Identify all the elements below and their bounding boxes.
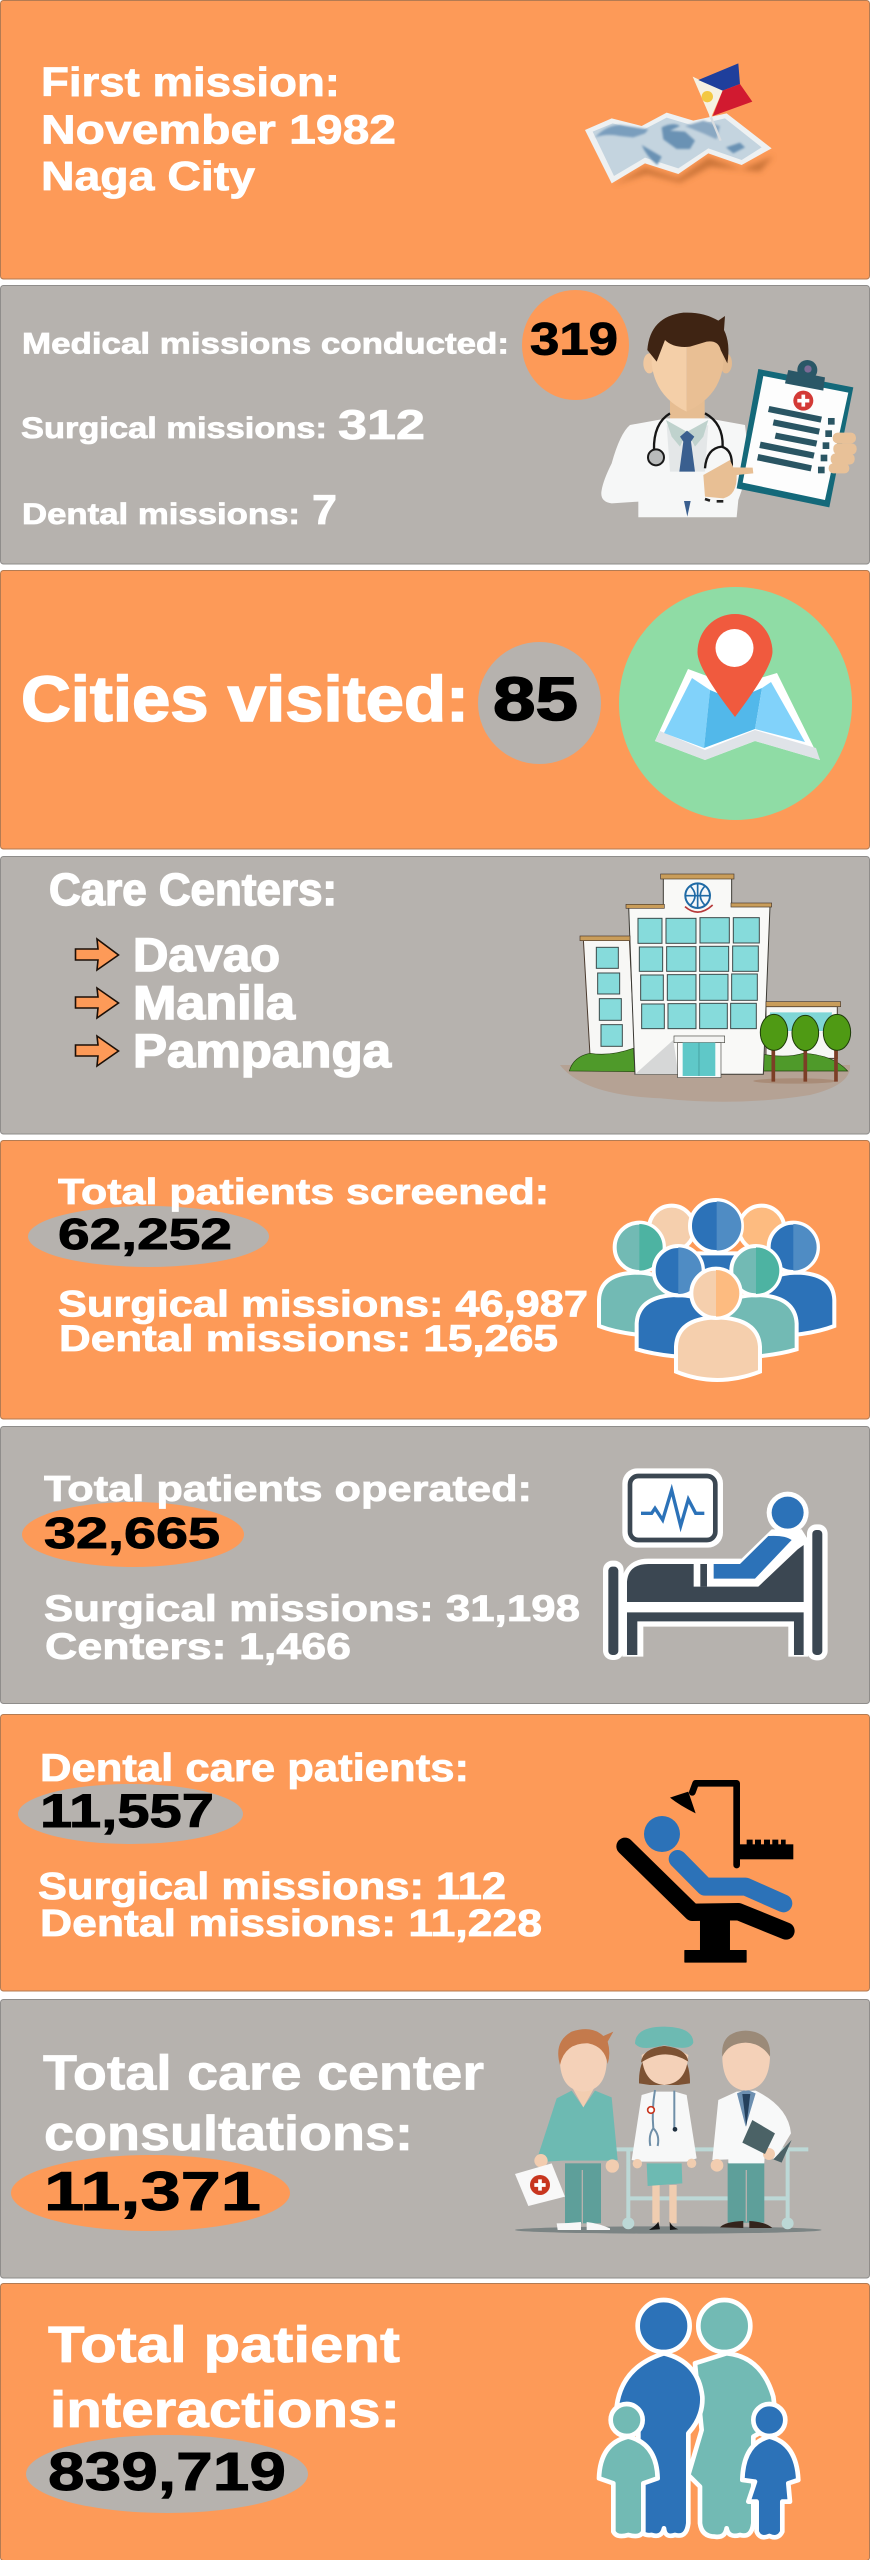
list: care center cities (76, 928, 392, 1077)
icon: patient in bed with monitor (603, 1468, 828, 1660)
badge: 839,719: 839,719 (48, 2442, 286, 2502)
text: surgical missions: Surgical missions: 46,987 (58, 1284, 588, 1324)
panel: missions conducted (0, 286, 870, 564)
man with kit (515, 2029, 619, 2230)
heading: total patients screened: Total patients screened: (58, 1171, 549, 1212)
icon: medical team (515, 2027, 822, 2234)
icon: crowd of people (599, 1200, 834, 1380)
arrow (76, 988, 118, 1018)
heading: dental care patients: Dental care patients: (40, 1747, 469, 1790)
badge: 319 (522, 290, 629, 400)
text: cities visited: Cities visited: (21, 663, 469, 735)
panel: first mission (0, 0, 870, 279)
icon: doctor with clipboard (601, 313, 857, 517)
text: first mission date and place: First mission: (41, 59, 340, 105)
icon: hospital building (560, 874, 851, 1102)
text: medical missions conducted: Medical missions conducted: (22, 328, 509, 360)
panel: dental care patients (0, 1714, 870, 1991)
text: dental missions 7 (22, 486, 337, 533)
badge: 11,557 (18, 1784, 243, 1844)
panel: total patients operated (0, 1426, 870, 1704)
text: centers: Centers: 1,466 (45, 1626, 351, 1667)
panel: total care center consultations (0, 2000, 870, 2278)
text: first mission date and place (41, 59, 396, 199)
text: dental missions 7: 7 (312, 486, 337, 533)
text: dental missions: Dental missions: 11,228 (40, 1903, 542, 1945)
icon: dental chair (625, 1783, 793, 1963)
badge: 319: 319 (530, 314, 618, 364)
heading: total care center consultations (43, 2046, 484, 2161)
badge: 11,557: 11,557 (40, 1784, 214, 1837)
panel: care centers (0, 856, 870, 1134)
badge: 839,719 (26, 2435, 308, 2513)
text: surgical missions 312: 312 (338, 401, 425, 448)
icon: map pin on green circle (619, 587, 852, 820)
badge: 11,371: 11,371 (44, 2160, 261, 2222)
panel: total patient interactions (0, 2284, 870, 2560)
text: first mission date and place: Naga City (41, 153, 255, 199)
badge: 32,665: 32,665 (44, 1509, 220, 1558)
city: Manila: Manila (133, 976, 296, 1029)
heading: care centers: Care Centers: (49, 864, 337, 915)
heading: total care center consultations: consultations: (44, 2107, 413, 2161)
city: Davao: Davao (133, 928, 280, 981)
arrow (76, 1036, 118, 1066)
badge: 11,371 (11, 2155, 290, 2231)
text: dental missions: Dental missions: 15,265 (59, 1318, 558, 1359)
text: surgical missions 312: Surgical missions: (21, 412, 327, 445)
text: first mission date and place: November 1982 (41, 106, 396, 152)
text: dental missions 7: Dental missions: (22, 498, 300, 531)
badge: 62,252: 62,252 (58, 1210, 232, 1259)
heading: total patients operated: Total patients operated: (44, 1468, 532, 1509)
badge: 62,252 (28, 1206, 269, 1267)
doctor with folder (711, 2031, 792, 2228)
heading: total patient interactions: interactions: (50, 2381, 400, 2438)
heading: total patient interactions: Total patient (48, 2316, 400, 2373)
nurse (632, 2027, 697, 2230)
heading: total care center consultations: Total care center (43, 2046, 484, 2100)
text: surgical missions: Surgical missions: 31,198 (44, 1588, 580, 1629)
badge: 85 (478, 642, 601, 764)
icon: family of four (599, 2300, 798, 2537)
panel: total patients screened (0, 1140, 870, 1419)
panel: cities visited (0, 570, 870, 849)
text: surgical missions: Surgical missions: 112 (38, 1866, 506, 1908)
city: Pampanga: Pampanga (133, 1024, 392, 1077)
text: surgical missions 312 (21, 401, 425, 448)
arrow (76, 939, 118, 970)
badge: 85: 85 (493, 665, 578, 733)
badge: 32,665 (22, 1502, 244, 1567)
icon: folded map with Philippine flag (585, 63, 773, 185)
heading: total patient interactions (48, 2316, 400, 2438)
